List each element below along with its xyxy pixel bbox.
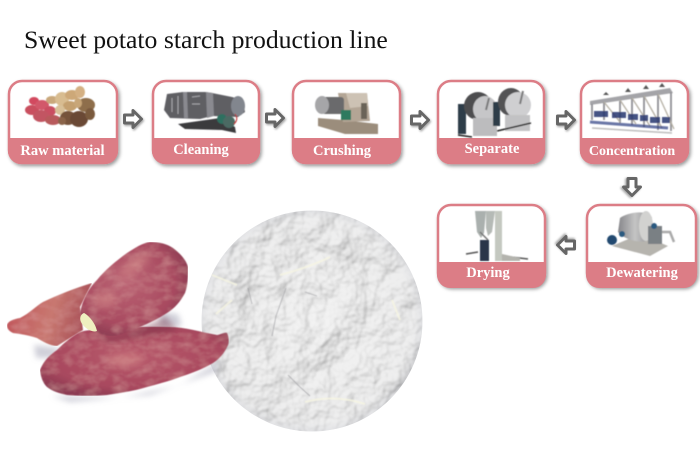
- card: Dewatering: [586, 205, 697, 288]
- label: Dewatering: [606, 265, 679, 281]
- image: separators: [458, 88, 531, 137]
- shadow: [34, 312, 222, 402]
- arrow: [558, 112, 574, 128]
- card: Raw material: [8, 81, 118, 164]
- arrow: [124, 110, 142, 128]
- back potato: [7, 283, 92, 346]
- label: Crushing: [313, 143, 372, 159]
- image: rotary cleaner: [164, 92, 245, 133]
- label: Drying: [466, 265, 510, 281]
- image: hydrocyclones: [590, 83, 674, 133]
- card: Drying: [437, 205, 546, 288]
- contact shading under top potato: [86, 316, 178, 342]
- starch powder circle: [202, 210, 422, 432]
- label: Cleaning: [173, 142, 230, 158]
- card: Concentration: [580, 81, 689, 164]
- card: Separate: [437, 81, 545, 164]
- image: dryer: [466, 211, 528, 261]
- arrow: [558, 236, 574, 254]
- top potato: [80, 242, 188, 336]
- label: Raw material: [20, 143, 105, 159]
- sweet potatoes: [7, 242, 229, 402]
- card: Crushing: [292, 81, 401, 164]
- label: Concentration: [589, 144, 675, 159]
- image: raw material pile: [25, 86, 95, 127]
- arrow: [266, 110, 284, 126]
- skin highlights: [93, 250, 153, 367]
- arrow: [624, 178, 640, 196]
- card: Cleaning: [152, 81, 260, 164]
- image: crusher: [315, 93, 378, 134]
- image: vacuum drum: [607, 211, 674, 256]
- label: Separate: [465, 141, 520, 157]
- arrow: [412, 112, 428, 128]
- bottom potato: [40, 327, 229, 396]
- cut end: [80, 313, 97, 331]
- title: Sweet potato starch production line: [24, 25, 388, 54]
- powder cracks and ridges: [212, 257, 400, 404]
